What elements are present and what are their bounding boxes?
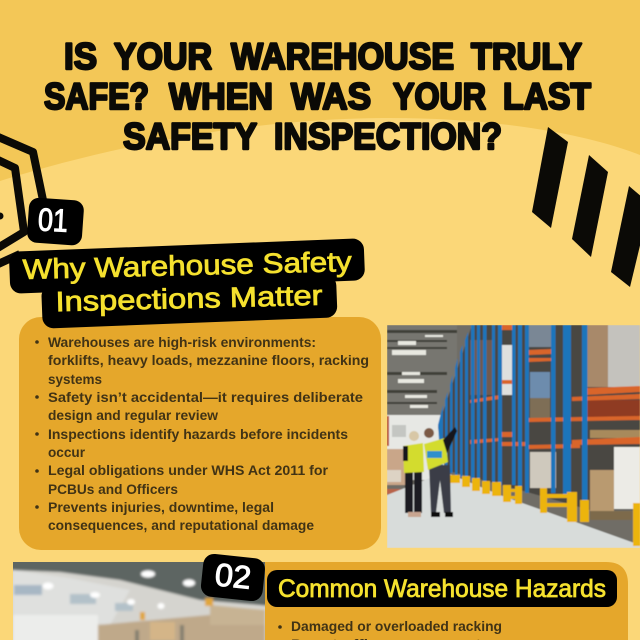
title: INSPECTION?: [274, 116, 502, 157]
title: YOUR: [114, 36, 212, 77]
title: IS: [64, 36, 97, 77]
title: WAS: [291, 76, 371, 117]
number badge 02: 02: [213, 556, 253, 596]
title: SAFE?: [44, 76, 149, 117]
title: TRULY: [471, 36, 582, 77]
goods behind racks: [438, 325, 640, 510]
decorative hazard stripes: [532, 127, 640, 287]
bullet list: [278, 619, 502, 640]
workers: [403, 427, 457, 517]
yellow guards: [450, 475, 640, 546]
bullet list: Legal obligations under WHS Act 2011 for: [48, 463, 329, 478]
bullet list: Warehouses are high-risk environments:: [48, 335, 316, 350]
number badge 02: [200, 553, 266, 602]
number badge 01: 01: [37, 201, 69, 239]
panel: why inspections matter: [19, 317, 381, 550]
bullet list: Prevents injuries, downtime, legal: [48, 500, 274, 515]
title: WHEN: [169, 76, 273, 117]
number badge 01: [26, 197, 84, 246]
panel: common warehouse hazards: [265, 562, 628, 640]
photo: blurred warehouse interior: [8, 557, 270, 640]
ceiling: [387, 325, 457, 420]
title: SAFETY: [123, 116, 257, 157]
floor: [387, 472, 640, 548]
title: [44, 36, 591, 157]
bullet list: occur: [48, 445, 86, 460]
heading: why warehouse safety inspections matter: Inspections Matter: [55, 280, 323, 317]
bullet list: systems: [48, 372, 102, 387]
title: WAREHOUSE: [231, 36, 454, 77]
heading: why warehouse safety inspections matter: Why Warehouse Safety: [22, 246, 352, 285]
heading: why warehouse safety inspections matter: [9, 238, 367, 330]
photo: workers in warehouse aisle: [387, 325, 640, 548]
bullet list: Safety isn’t accidental—it requires deliberate: [48, 390, 363, 405]
icon: hexagon outline: [0, 136, 44, 265]
bullet list: Damaged or overloaded racking: [291, 619, 502, 634]
title: LAST: [503, 76, 591, 117]
blue uprights: [438, 325, 588, 503]
bullet list: [35, 335, 369, 533]
title: YOUR: [393, 76, 486, 117]
bullet list: PCBUs and Officers: [48, 482, 178, 497]
bullet list: design and regular review: [48, 408, 219, 423]
orange beams: [470, 325, 640, 449]
bullet list: forklifts, heavy loads, mezzanine floors, racking: [48, 353, 369, 368]
bullet list: Inspections identify hazards before incidents: [48, 427, 348, 442]
heading: common warehouse hazards: Common Warehouse Hazards: [278, 575, 606, 603]
bullet list: consequences, and reputational damage: [48, 518, 314, 533]
